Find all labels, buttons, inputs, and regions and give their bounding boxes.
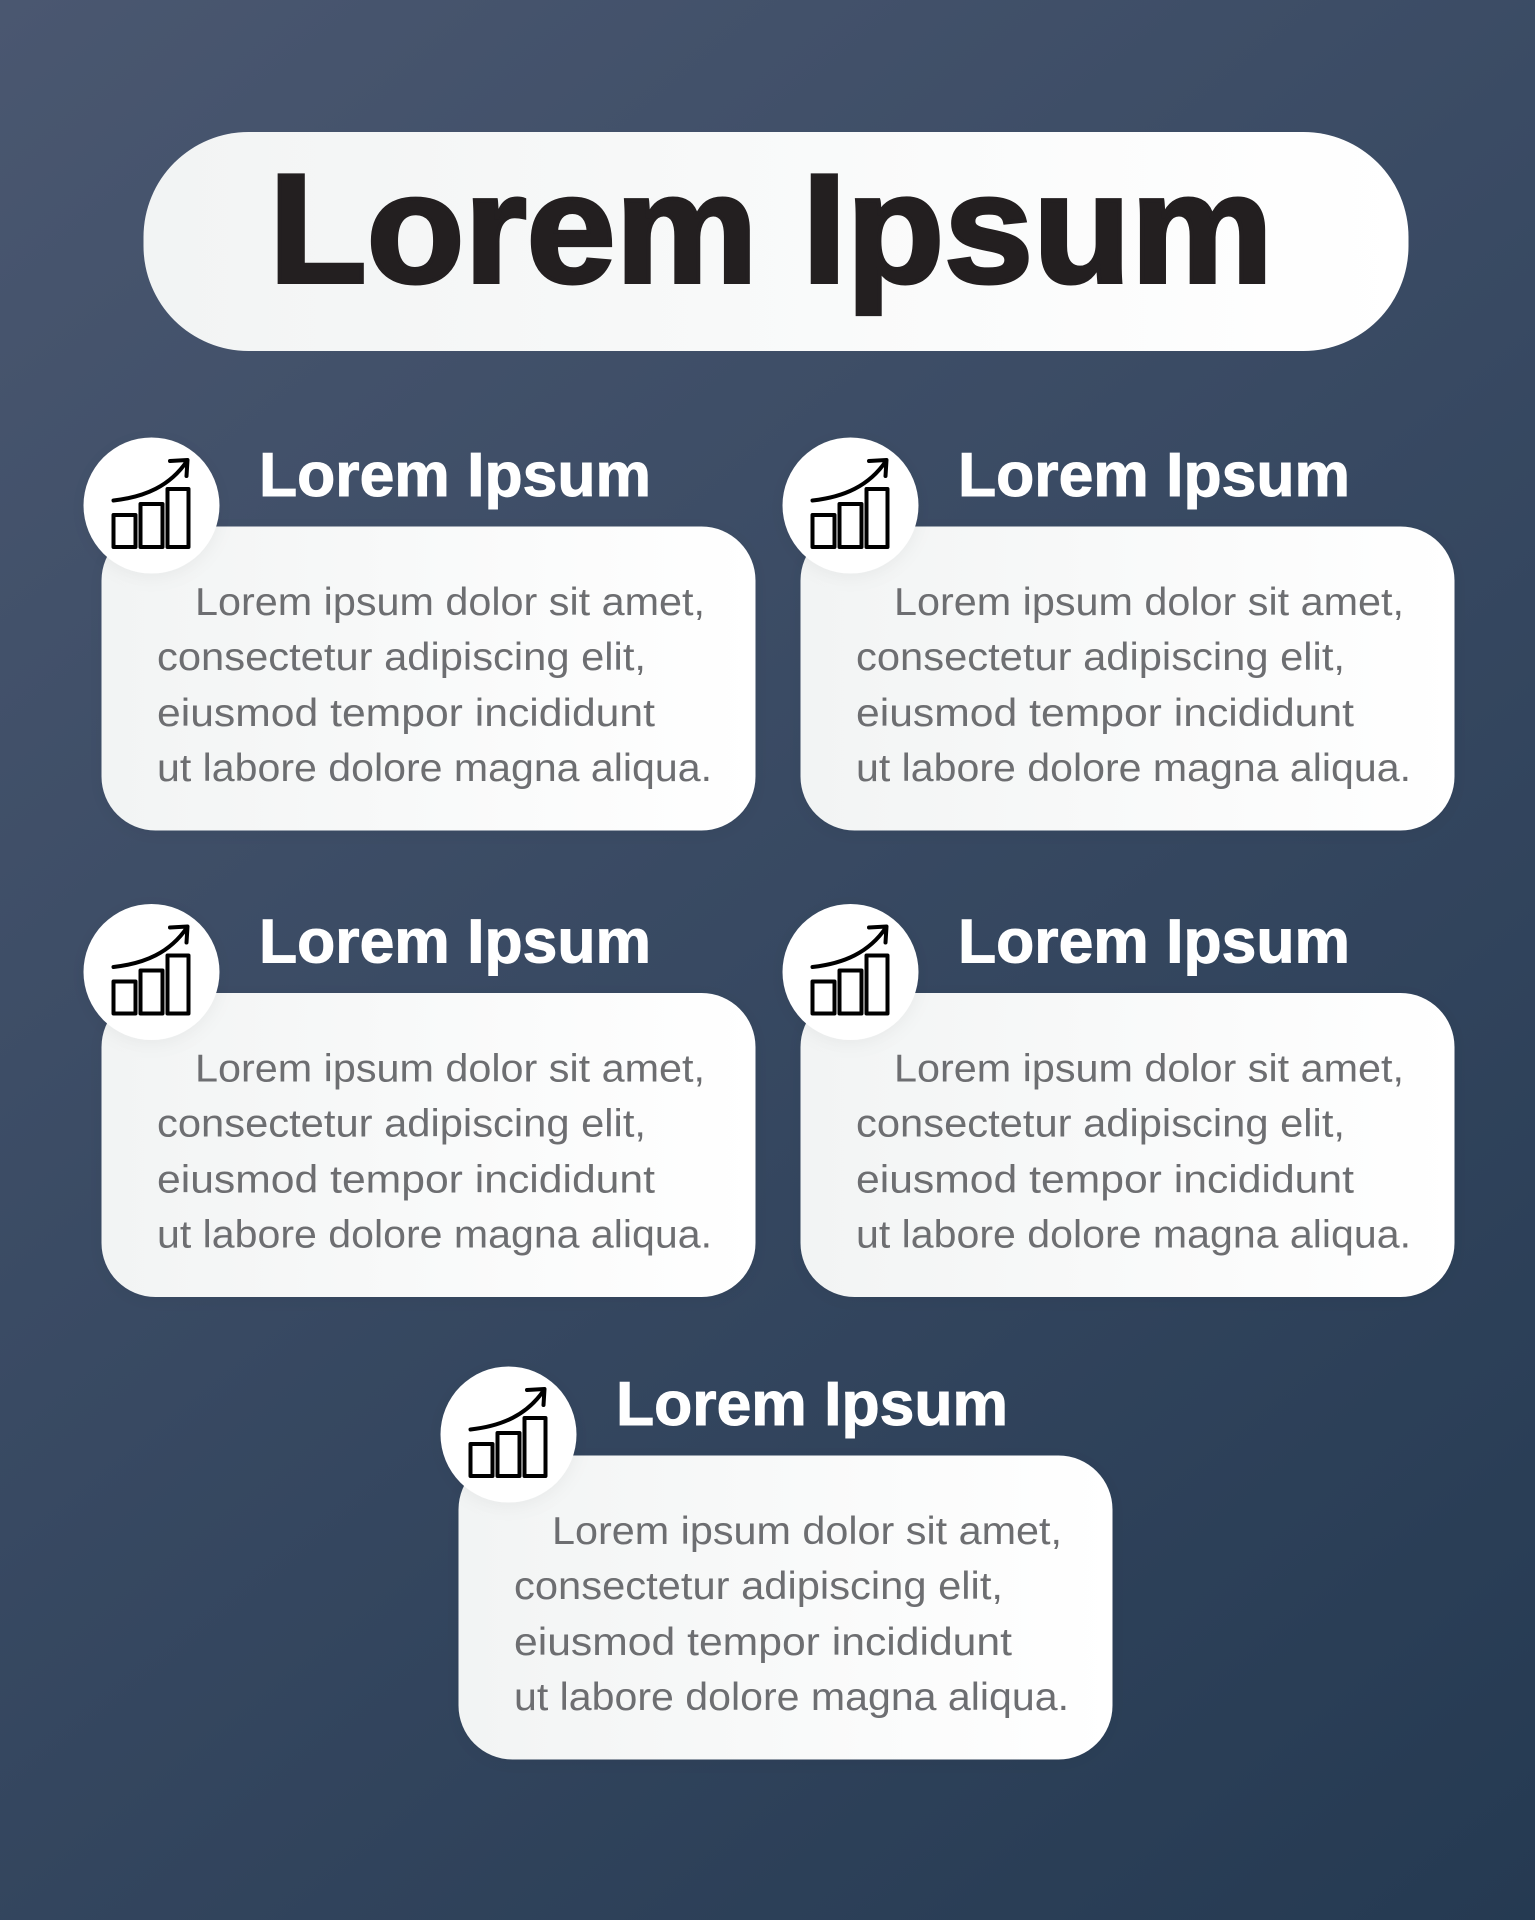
card 1 body text: ut labore dolore magna aliqua. [157, 747, 712, 790]
card 1 body text: Lorem ipsum dolor sit amet, [195, 581, 705, 624]
card 4 icon: growth chart [782, 904, 918, 1040]
card 5 body text [514, 1510, 1069, 1719]
card 1 body text: eiusmod tempor incididunt [157, 692, 655, 735]
card 3 body text [157, 1048, 712, 1256]
card 2 body text: Lorem ipsum dolor sit amet, [894, 581, 1404, 624]
card 2 heading: Lorem Ipsum [958, 441, 1350, 510]
card 5 body text: consectetur adipiscing elit, [514, 1565, 1003, 1608]
card 2 body text: consectetur adipiscing elit, [856, 636, 1345, 679]
card 4 heading: Lorem Ipsum [958, 908, 1350, 976]
card 3 body text: consectetur adipiscing elit, [157, 1102, 646, 1146]
card 2 body text: eiusmod tempor incididunt [856, 692, 1354, 735]
card 4 body text: Lorem ipsum dolor sit amet, [894, 1048, 1404, 1090]
panel: card 4 [782, 904, 1454, 1297]
card 3 icon: growth chart [84, 904, 220, 1040]
panel: card 2 [782, 438, 1454, 830]
title: Lorem Ipsum [269, 142, 1273, 315]
card 3 body text: Lorem ipsum dolor sit amet, [195, 1048, 705, 1090]
card 5 body text: Lorem ipsum dolor sit amet, [552, 1510, 1062, 1553]
card 1 body text [157, 581, 712, 790]
card 4 body text: eiusmod tempor incididunt [856, 1158, 1354, 1202]
panel: card 3 [84, 904, 756, 1297]
card 5 box [458, 1456, 1112, 1760]
card 4 body text: ut labore dolore magna aliqua. [856, 1214, 1411, 1256]
card 2 body text [856, 581, 1411, 790]
card 1 icon: growth chart [84, 438, 220, 574]
card 2 box [800, 526, 1454, 830]
panel: card 5 [440, 1366, 1112, 1760]
card 5 body text: eiusmod tempor incididunt [514, 1621, 1012, 1664]
card 4 body text: consectetur adipiscing elit, [856, 1102, 1345, 1146]
card 3 body text: eiusmod tempor incididunt [157, 1158, 655, 1202]
card 3 body text: ut labore dolore magna aliqua. [157, 1214, 712, 1256]
card 5 icon: growth chart [440, 1366, 576, 1502]
card 5 body text: ut labore dolore magna aliqua. [514, 1676, 1069, 1719]
card 4 box [800, 993, 1454, 1297]
card 5 heading: Lorem Ipsum [616, 1370, 1008, 1439]
card 3 box [102, 993, 756, 1297]
panel: card 1 [84, 438, 756, 830]
card 1 heading: Lorem Ipsum [259, 441, 651, 510]
card 4 body text [856, 1048, 1411, 1256]
title banner [144, 132, 1408, 351]
card 3 heading: Lorem Ipsum [259, 908, 651, 976]
card 2 icon: growth chart [782, 438, 918, 574]
card 1 box [102, 526, 756, 830]
card 1 body text: consectetur adipiscing elit, [157, 636, 646, 679]
card 2 body text: ut labore dolore magna aliqua. [856, 747, 1411, 790]
